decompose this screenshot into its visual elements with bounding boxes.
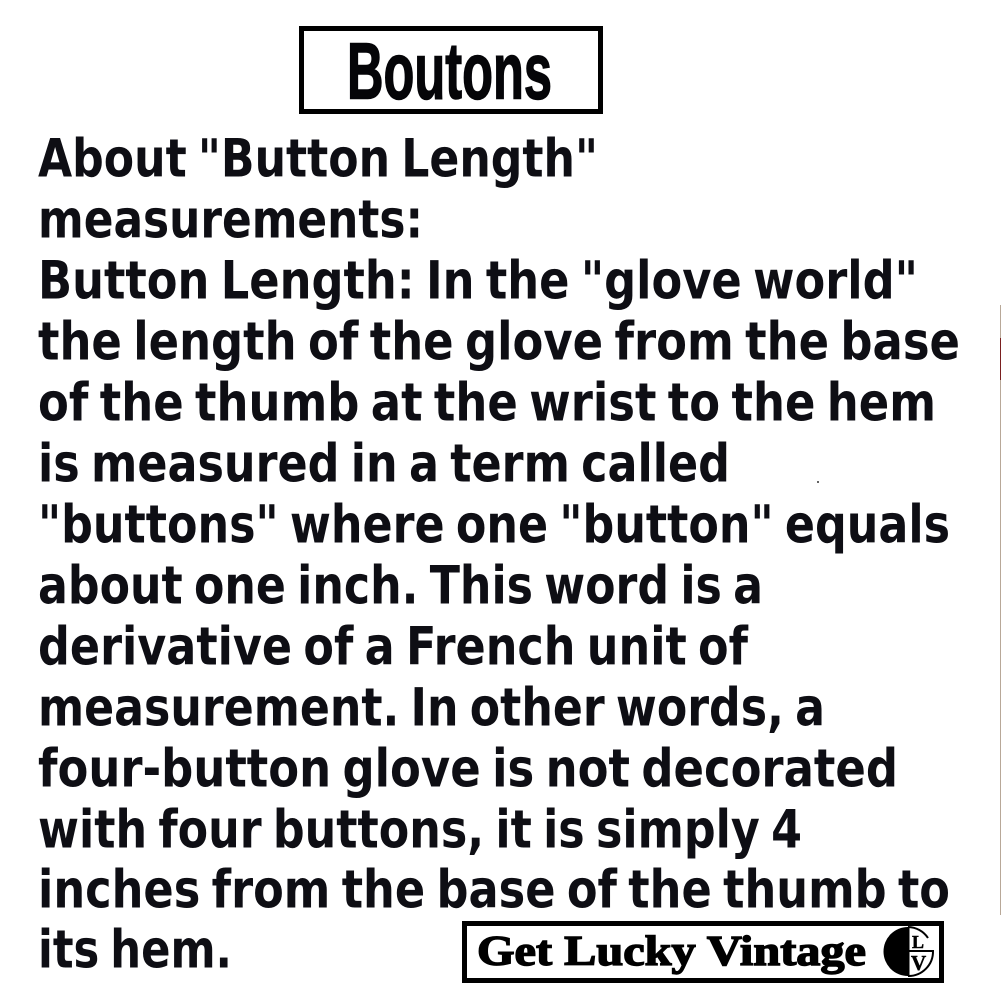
brand box <box>464 924 942 980</box>
speck <box>817 481 819 483</box>
body text: with four buttons, it is simply 4 <box>38 800 802 860</box>
icon: GLV logo: V <box>911 951 926 975</box>
body text: measurement. In other words, a <box>38 678 825 738</box>
brand box: Get Lucky Vintage <box>477 929 866 975</box>
title box <box>302 26 600 116</box>
right edge strip <box>1000 305 1001 915</box>
body text <box>38 128 960 980</box>
body text: measurements: <box>38 190 423 250</box>
body text: derivative of a French unit of <box>38 616 749 678</box>
body text: is measured in a term called <box>38 434 730 494</box>
body text: about one inch. This word is a <box>38 556 763 616</box>
body text: About "Button Length" <box>38 128 598 190</box>
icon: GLV logo: L <box>912 932 924 952</box>
icon: GLV logo <box>883 927 933 976</box>
body text: its hem. <box>38 920 232 980</box>
title box: Boutons <box>347 26 552 116</box>
